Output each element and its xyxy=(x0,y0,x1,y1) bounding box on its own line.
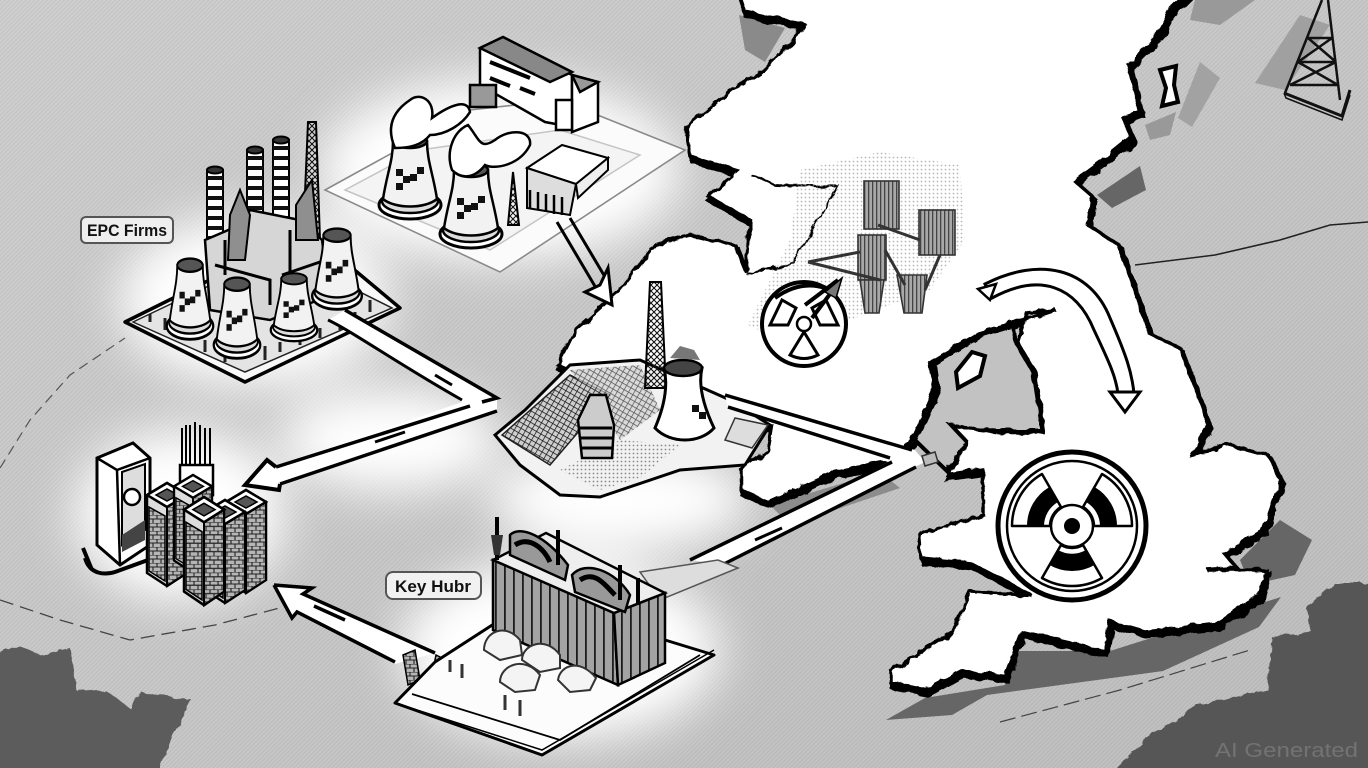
chimneys xyxy=(207,166,223,270)
site: central reactor patch xyxy=(495,282,770,497)
icon: small radiation symbol xyxy=(762,278,846,366)
pipes stack xyxy=(180,465,213,495)
main building xyxy=(470,37,598,132)
halo glows behind sites xyxy=(75,80,750,740)
icon: large radiation symbol xyxy=(998,452,1146,600)
arrow: central site to hub via junction xyxy=(640,395,938,600)
cooling towers and steam xyxy=(379,134,441,219)
label: EPC Firms xyxy=(81,217,173,243)
map cracks and borders xyxy=(0,222,1368,722)
platform xyxy=(125,245,400,382)
site: EPC firms plant xyxy=(125,122,400,382)
reactor xyxy=(578,395,614,458)
arrow: hub to data units xyxy=(274,585,446,685)
watermark: AI Generated: AI Generated xyxy=(1215,740,1358,762)
island off east coast xyxy=(1160,66,1178,106)
platform xyxy=(395,620,714,755)
dotted reactor patch on map xyxy=(748,152,965,335)
cooling towers xyxy=(312,229,362,309)
transmission tower top right xyxy=(1284,0,1350,120)
plate xyxy=(325,100,685,272)
arrow: EPC firms to data units xyxy=(245,310,497,490)
label: Key Hubr: Key Hubr xyxy=(395,577,471,596)
cooling tower xyxy=(655,368,714,440)
dark land: lower right xyxy=(1095,583,1368,768)
arrow: curved England arrow xyxy=(978,269,1140,412)
map: British Isles landmass xyxy=(558,0,1283,694)
Irish Sea tone xyxy=(916,326,1042,472)
coast shadows xyxy=(739,0,1330,720)
tall building xyxy=(493,560,618,685)
domes xyxy=(484,631,596,692)
site: key hub xyxy=(395,517,714,755)
dark land: lower left xyxy=(0,645,192,768)
server units xyxy=(147,483,187,586)
lattice tower xyxy=(645,282,666,388)
relay pad xyxy=(640,560,738,600)
roof machines xyxy=(510,531,568,580)
grey reactor cluster xyxy=(808,181,955,313)
site: data units cluster xyxy=(83,422,266,605)
small chimney xyxy=(508,172,519,225)
arrow: top plant to map xyxy=(557,218,612,305)
label: EPC Firms: EPC Firms xyxy=(87,221,167,240)
low building xyxy=(527,145,608,215)
label: Key Hubr xyxy=(386,572,481,599)
site: top plant on white plate xyxy=(325,37,685,272)
tall cabinet xyxy=(97,443,150,565)
island in Irish Sea xyxy=(956,352,985,388)
central block xyxy=(205,210,330,320)
